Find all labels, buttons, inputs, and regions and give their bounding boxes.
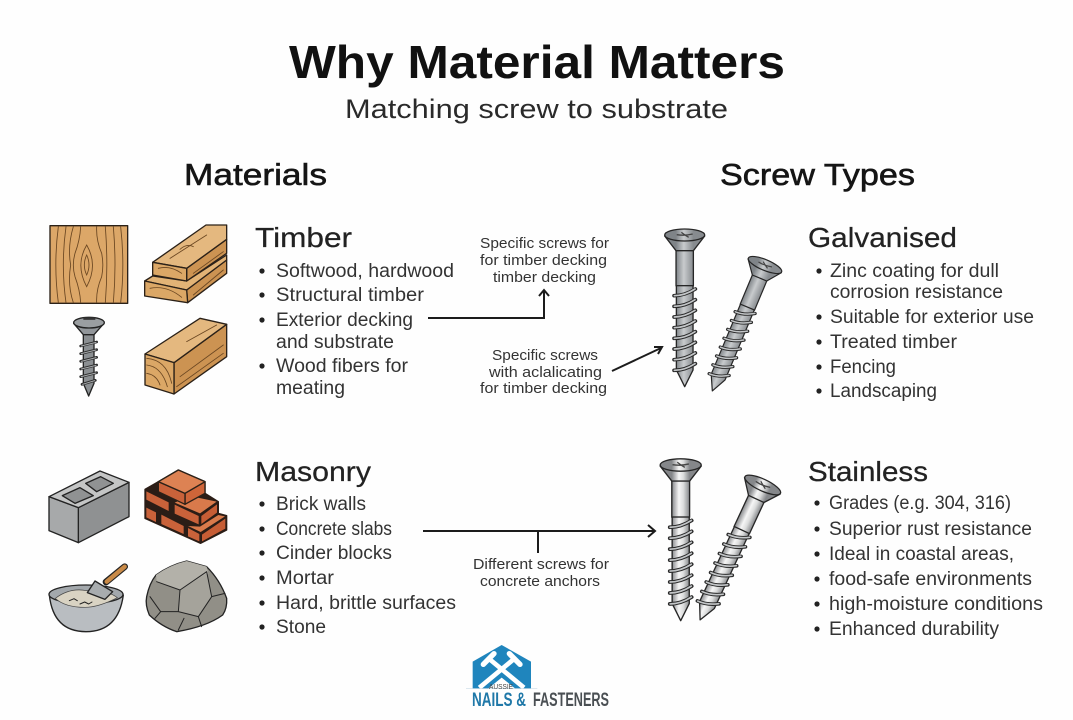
list: galvanised: Suitable for exterior use xyxy=(830,307,1034,328)
logo xyxy=(466,645,609,711)
icon: stone xyxy=(146,561,227,632)
panel: stainless xyxy=(808,456,1043,640)
callout: timber decking bottom: Specific screws xyxy=(492,348,598,364)
logo text: AUSSIE xyxy=(489,682,513,691)
list: galvanised xyxy=(816,261,1034,402)
icon: mortar bowl and trowel xyxy=(49,567,125,632)
list: timber: Structural timber xyxy=(276,285,425,306)
list: galvanised: Landscaping xyxy=(830,381,937,402)
list: timber xyxy=(259,261,454,399)
list: masonry: Brick walls xyxy=(276,494,366,515)
callout: timber decking top xyxy=(480,236,609,286)
heading: timber: Timber xyxy=(255,222,352,253)
list: galvanised: Fencing xyxy=(830,357,896,378)
icon: stacked timber boards xyxy=(145,225,227,303)
callout: concrete anchors xyxy=(473,557,609,590)
heading: materials: Materials xyxy=(184,157,327,192)
list: masonry: Hard, brittle surfaces xyxy=(276,593,456,614)
heading: stainless: Stainless xyxy=(808,456,928,487)
list: stainless: food-safe environments xyxy=(829,569,1032,590)
subtitle: Matching screw to substrate xyxy=(345,94,728,124)
heading: masonry: Masonry xyxy=(255,456,371,487)
list: galvanised: Zinc coating for dull xyxy=(830,261,999,282)
arrow: callout to galvanised screws xyxy=(612,347,662,371)
list: stainless: Grades (e.g. 304, 316) xyxy=(829,493,1011,514)
icon: wood grain square xyxy=(50,226,128,303)
icons: timber xyxy=(50,225,227,396)
panel: masonry xyxy=(255,456,456,638)
list: stainless: Enhanced durability xyxy=(829,619,1000,640)
icon: galvanised screw, straight xyxy=(665,229,705,387)
list: galvanised: corrosion resistance xyxy=(830,282,1003,303)
arrow: masonry to stainless screws xyxy=(423,525,655,553)
icon: cinder block xyxy=(49,471,129,543)
list: timber: meating xyxy=(276,378,345,399)
list: masonry: Stone xyxy=(276,617,326,638)
list: stainless xyxy=(814,493,1043,640)
callout: timber decking bottom: with aclalicating xyxy=(488,365,602,381)
callout: timber decking top: Specific screws for xyxy=(480,236,609,252)
list: stainless: Ideal in coastal areas, xyxy=(829,544,1014,565)
icon: brick stack xyxy=(145,470,227,543)
callout: timber decking bottom: for timber decking xyxy=(480,381,607,397)
list: timber: Exterior decking xyxy=(276,310,413,331)
list: galvanised: Treated timber xyxy=(830,332,958,353)
list: masonry xyxy=(259,494,456,638)
icon: stainless screw, angled xyxy=(682,471,783,628)
logo wordmark: nails: NAILS & xyxy=(472,690,526,711)
icon: galvanised screw, angled xyxy=(696,253,784,398)
arrow: timber to callout xyxy=(428,290,549,318)
icon: small wood screw xyxy=(74,317,104,396)
list: masonry: Mortar xyxy=(276,568,335,589)
list: masonry: Cinder blocks xyxy=(276,543,392,564)
list: timber: Softwood, hardwood xyxy=(276,261,454,282)
logo wordmark: fasteners: FASTENERS xyxy=(533,690,609,711)
callout: timber decking top: for timber decking xyxy=(480,253,607,269)
callout: concrete anchors: concrete anchors xyxy=(480,574,600,590)
icon: logo house xyxy=(466,645,537,689)
icons: masonry xyxy=(49,470,227,632)
list: timber: and substrate xyxy=(276,332,394,353)
heading: galvanised: Galvanised xyxy=(808,222,957,253)
icon: stainless screw, straight xyxy=(660,459,701,621)
title: Why Material Matters xyxy=(289,36,785,88)
callout: timber decking top: timber decking xyxy=(493,270,596,286)
list: timber: Wood fibers for xyxy=(276,356,409,377)
heading: screw types: Screw Types xyxy=(720,157,915,192)
icon: timber beam xyxy=(145,318,227,394)
list: masonry: Concrete slabs xyxy=(276,519,392,540)
panel: timber xyxy=(255,222,454,399)
list: stainless: high-moisture conditions xyxy=(829,594,1043,615)
panel: galvanised xyxy=(808,222,1034,402)
list: stainless: Superior rust resistance xyxy=(829,519,1032,540)
callout: concrete anchors: Different screws for xyxy=(473,557,609,573)
callout: timber decking bottom xyxy=(480,348,607,397)
